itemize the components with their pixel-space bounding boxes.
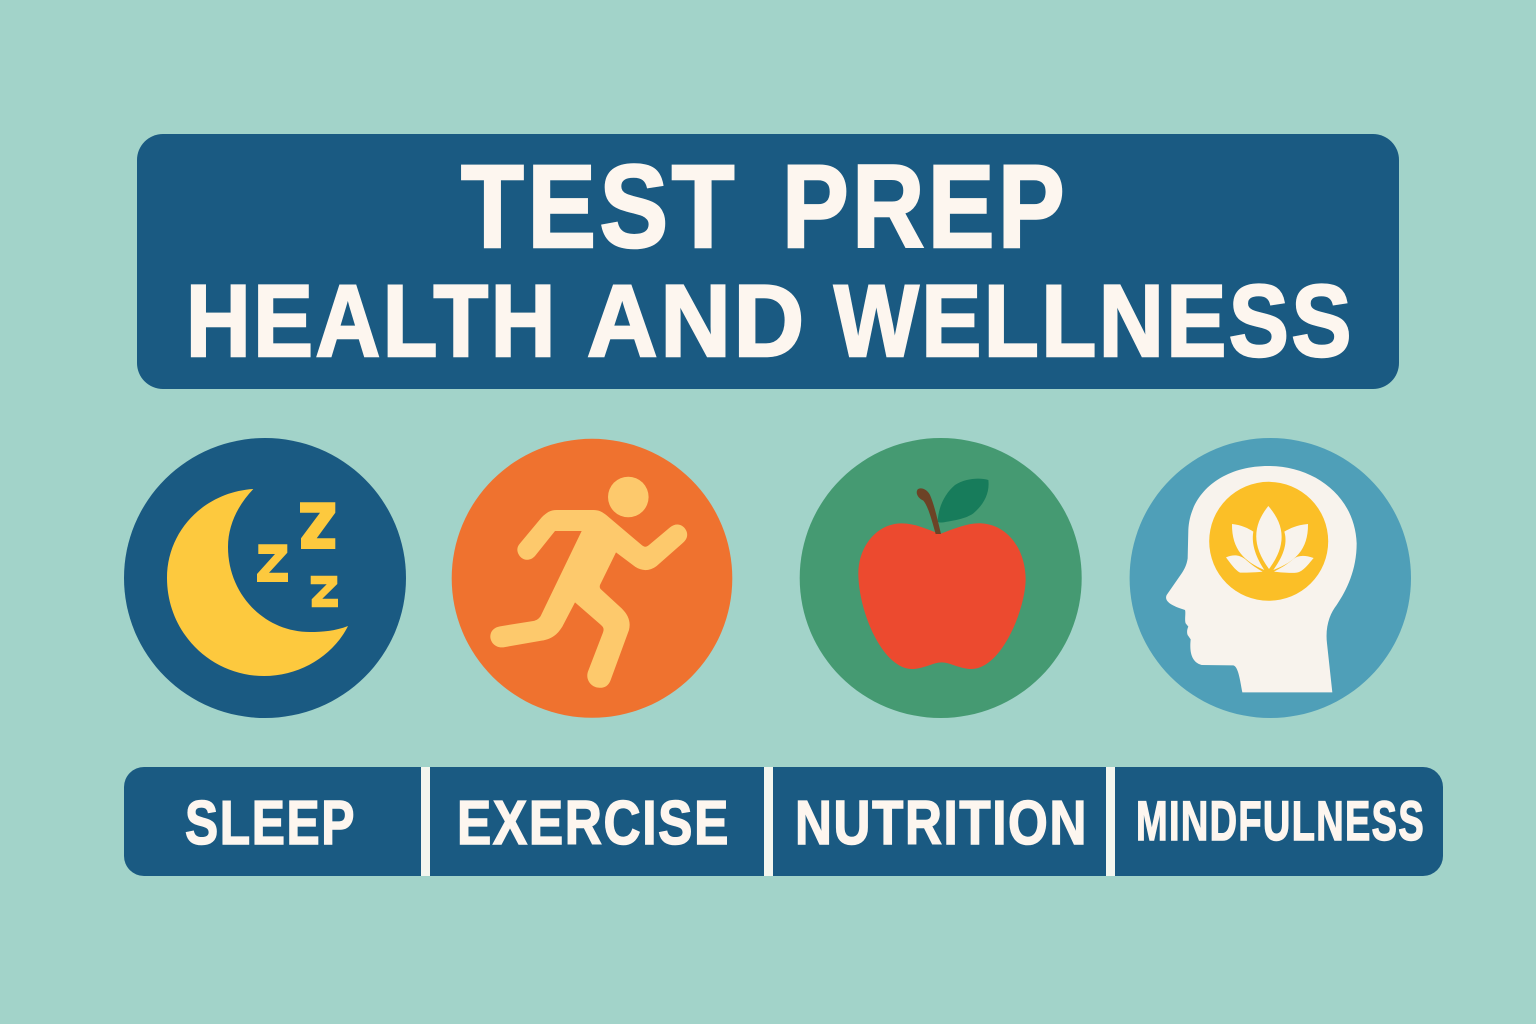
title line 2 [186,264,1354,378]
label: exercise: EXERCISE [457,789,730,858]
runner body [490,510,687,688]
title line 1: TEST [461,141,738,273]
apple body [858,523,1026,669]
apple stem [917,488,941,534]
label bar [124,767,1443,876]
title line 1: PREP [782,141,1068,273]
icon: nutrition apple [800,438,1082,718]
icon: exercise runner [452,439,732,718]
title line 1 [461,141,1068,273]
title line 2: HEALTH [186,264,558,378]
icon: sleep moon [124,438,406,718]
title banner [137,134,1399,389]
icon: z letters [257,502,338,607]
label: sleep: SLEEP [185,789,356,858]
icon: mindfulness head [1130,438,1411,718]
title line 2: WELLNESS [834,264,1354,378]
lotus flower [1226,506,1314,573]
title line 2: AND [587,264,807,378]
label: nutrition: NUTRITION [795,789,1088,858]
apple leaf [938,479,989,523]
